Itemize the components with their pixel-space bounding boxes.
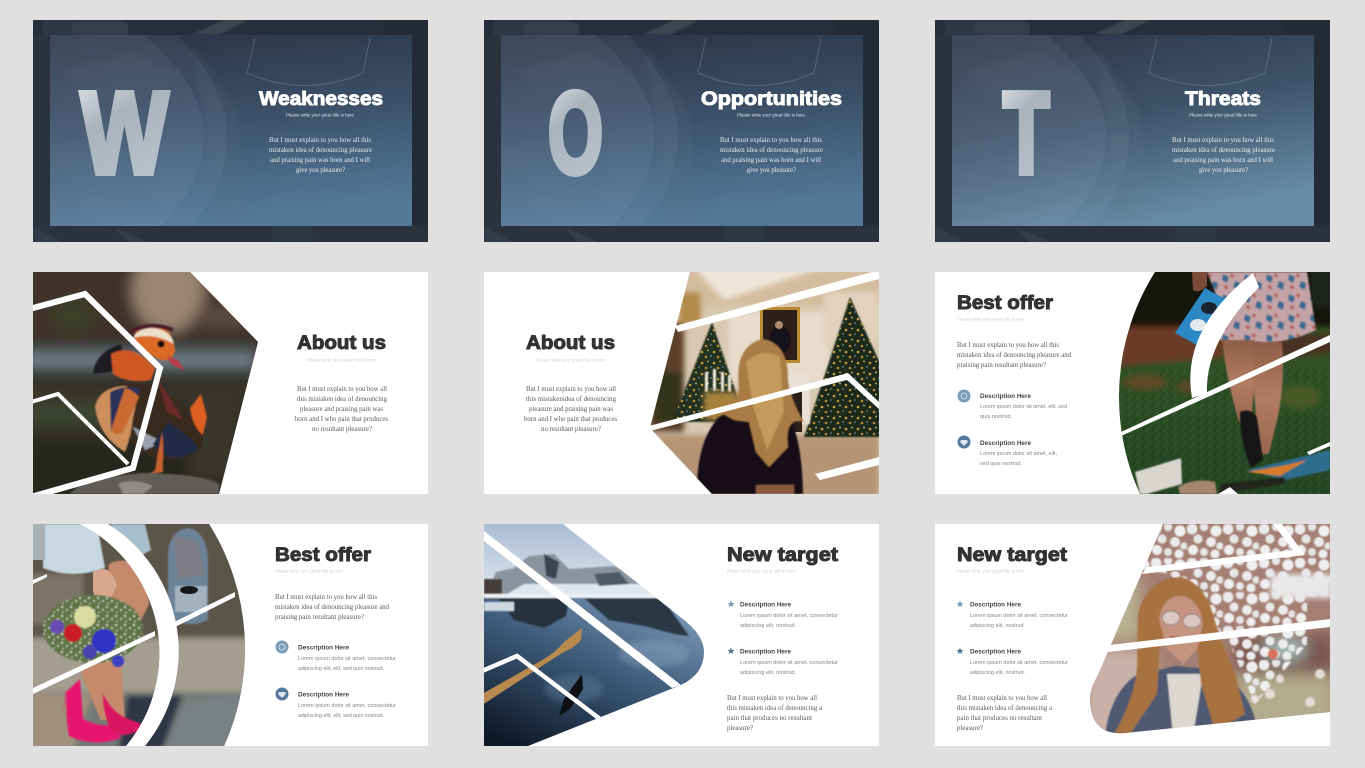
description block two [980,440,1057,467]
heading: About us: About us [526,333,615,354]
description block two: Description Here [970,648,1021,656]
body text [720,135,823,174]
description block two: adipiscing elit, elit, sed quis nostrud. [298,713,384,719]
Christmas tree right [804,297,884,437]
description block one: adipiscing elit, nostrud. [970,623,1025,629]
photo: woman on grass [1115,267,1335,494]
body text: and praising pain was born and I will [270,155,370,164]
body text: born and I who pain that produces [295,414,388,423]
body text [524,384,617,433]
body text: pleasure and praising pain was [529,404,613,413]
body text: pleasure? [727,723,753,732]
subtitle: Please write your great title is here [536,358,605,362]
panel: Best offer with bouquet photo [28,519,428,749]
icon: star [728,648,734,654]
white long stripe [484,531,681,688]
mantel [788,372,810,424]
subtitle: Please write your great title is here [286,112,354,118]
icon: star [956,648,964,654]
description block one: quis nostrud. [980,414,1012,420]
large letter O: O [548,68,603,198]
heading: About us: About us [297,333,386,354]
arch window [168,528,208,624]
pink heels [63,679,141,743]
body text: But I must explain to you how all this [720,135,822,144]
body text: But I must explain to you how all [957,693,1047,702]
description block one: adipiscing elit, elit, sed quis nostrud. [298,666,384,672]
white curved stripe [1190,273,1259,398]
subtitle: Please write your great title is here [957,316,1025,322]
body text: no resultant pleasure? [312,424,372,433]
description block one [740,602,838,629]
icon: gem [276,688,288,700]
photo: bouquet and pink heels [28,519,253,749]
description block one: Description Here [980,393,1031,400]
subtitle: Please write your great title is here [307,358,376,362]
photo: aerial city background [484,20,879,242]
body text: mistaken idea of denouncing pleasure and [275,602,389,611]
books on ground [1135,450,1330,494]
description block one: Description Here [740,602,791,608]
white stripe top [675,272,879,332]
body text: praising pain resultant pleasure? [275,612,364,621]
description block two: adipiscing elit, nostrud. [740,670,796,676]
description block one: Lorem ipsum dolor sit amet, consectetur [298,656,396,662]
white bokeh lights [1140,524,1330,704]
icon: target [276,640,288,654]
white diagonal line right [168,592,235,630]
description block one [980,393,1067,420]
body text: But I must explain to you how all this [269,135,371,144]
body text [269,135,372,174]
body text: pleasure and praising pain was [300,404,383,413]
white bottom triangle [1218,487,1238,494]
panel: About us with woman photo [484,267,884,497]
body text: pain that produces no resultant [957,713,1042,722]
body text: mistaken idea of denouncing pleasure [720,145,823,154]
panel: About us with duck photo [33,272,428,494]
bouquet [43,595,143,667]
Christmas tree left [673,322,738,423]
body text [295,384,388,433]
leg [81,561,149,720]
heading: New target: New target [957,545,1068,566]
painting [760,307,800,363]
white stripe top with corner [1142,524,1305,574]
body text: this mistakenidea of denouncing [526,394,616,403]
photo: aerial city background [33,20,428,242]
body text: mistaken idea of denouncing pleasure [1172,145,1275,154]
body text: praising pain resultant pleasure? [957,360,1046,369]
icon: gem [958,436,970,448]
shoe [1240,410,1263,468]
white small line [33,574,47,584]
body text: this mistaken idea of denouncing [297,394,387,403]
body text [1172,135,1275,174]
subtitle: Please write your great title is here [275,568,343,574]
heading: New target: New target [727,545,839,566]
blue gradient overlay panel [952,35,1314,226]
photo: lake and oar [482,524,709,746]
subtitle: Please write your great title is here [737,112,805,118]
description block two: sed quis nostrud. [980,461,1022,467]
photo: mandarin duck [33,272,258,494]
description block one: Lorem ipsum dolor sit amet, consectetur [970,613,1068,619]
icon: star [728,601,734,607]
heading: Best offer: Best offer [275,545,372,566]
white small stripe [1307,442,1330,455]
description block two: Description Here [740,648,791,656]
subtitle: Please write your great title is here [957,568,1025,574]
blue gradient overlay panel [501,35,863,226]
heading: Threats: Threats [1185,89,1261,110]
panel: Opportunities slide [484,20,879,242]
large letter W: W [81,68,168,198]
woman portrait [1105,577,1257,739]
duck body [93,325,207,476]
description block one: Description Here [298,644,349,652]
body text: mistaken idea of denouncing pleasure [269,145,372,154]
white diagonal line [1121,335,1330,436]
subtitle: Please write your great title is here [727,568,795,574]
icon: target [958,390,970,402]
icon: star [956,601,964,607]
white corner line [482,656,600,719]
description block one [298,644,396,672]
description block two: Description Here [298,692,349,698]
legs [1222,340,1283,454]
heading: Weaknesses: Weaknesses [259,89,383,110]
white stripe middle with corner [649,373,879,431]
description block two: Lorem ipsum dolor sit amet, consectetur [970,660,1068,666]
body text: But I must explain to you how all this [275,592,377,601]
woman [697,339,804,494]
description block two: Description Here [980,440,1031,447]
heading: Best offer: Best offer [957,293,1054,314]
body text: But I must explain to you how all [297,384,387,393]
subtitle: Please write your great title is here [1189,112,1257,118]
white stripe bottom [815,457,879,480]
description block one [970,602,1068,629]
heading: Opportunities: Opportunities [701,89,842,110]
description block one: Lorem ipsum dolor sit amet, elit, sed [980,404,1067,410]
rock [70,473,219,494]
body text: pain that produces no resultant [727,713,812,722]
white diagonal line left [33,631,155,694]
white hexagon lines [31,294,160,497]
description block two [970,648,1068,676]
body text: and praising pain was born and I will [1173,155,1273,164]
body text: this mistaken idea of denouncing a [957,703,1053,712]
photo: woman with glasses and bokeh [1085,524,1335,746]
body text [275,592,389,621]
panel: Weaknesses slide [33,20,428,242]
body text: mistaken idea of denouncing pleasure and [957,350,1071,359]
description block two: Lorem ipsum dolor sit amet, elit, [980,451,1057,457]
body text: give you pleasure? [1199,165,1248,174]
panel: New target with lake photo [482,524,879,746]
description block one: Description Here [970,602,1021,608]
white thick arc [80,524,179,746]
description block two: Lorem ipsum dolor sit amet, consectetur [740,660,838,666]
body text: and praising pain was born and I will [721,155,821,164]
white stripe middle [1108,619,1330,652]
body text: no resultant pleasure? [541,424,601,433]
body text: this mistaken idea of denouncing a [727,703,823,712]
large letter T: T [1003,68,1050,198]
body text: But I must explain to you how all [727,693,817,702]
body text [957,693,1053,732]
panel: New target with portrait photo [935,524,1335,746]
description block two [298,692,396,719]
body text: born and I who pain that produces [524,414,617,423]
description block one: adipiscing elit, nostrud. [740,623,796,629]
dark oar blade reflection [559,674,583,716]
body text: give you pleasure? [747,165,796,174]
blue gradient overlay panel [50,35,412,226]
body text: pleasure? [957,723,983,732]
body text: But I must explain to you how all this [1172,135,1274,144]
body text [727,693,823,732]
dress [1207,272,1316,343]
description block two [740,648,838,676]
book and hand [1175,288,1227,348]
body text: give you pleasure? [296,165,345,174]
photo: woman and Christmas trees [644,267,884,497]
description block one: Lorem ipsum dolor sit amet, consectetur [740,613,838,619]
candles [705,369,731,392]
oar [482,628,582,705]
body text: But I must explain to you how all this [957,340,1059,349]
description block two: Lorem ipsum dolor sit amet, consectetur [298,703,396,709]
body text: But I must explain to you how all [526,384,616,393]
panel: Threats slide [935,20,1330,242]
panel: Best offer with walking legs photo [935,267,1335,494]
body text [957,340,1071,369]
photo: aerial city background [935,20,1330,242]
skirt [43,524,105,574]
description block two: adipiscing elit, nostrud. [970,670,1025,676]
